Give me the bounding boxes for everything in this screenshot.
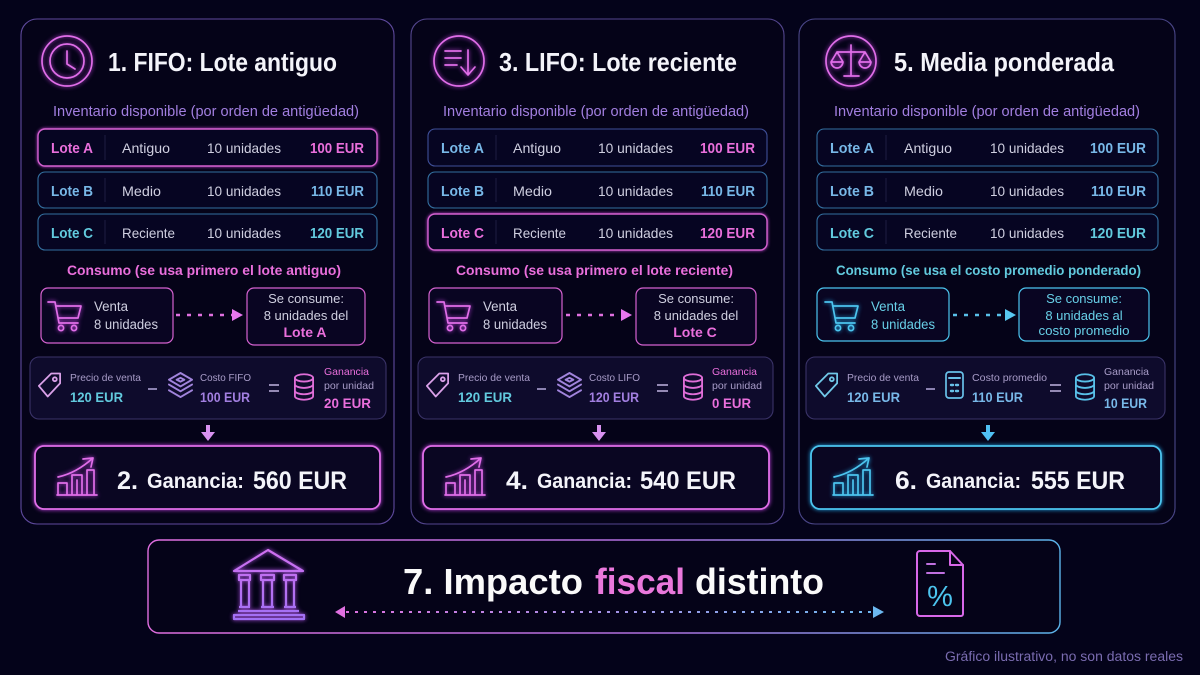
- row: Lote C: 120 EUR: [310, 226, 364, 242]
- row: Lote A: Lote A: [51, 141, 93, 157]
- heading: fiscal impact: [403, 561, 824, 602]
- row: Lote B: 110 EUR: [311, 184, 364, 200]
- consumption box: [636, 288, 756, 345]
- consumption box: 8 unidades del: [264, 308, 348, 323]
- sale box: Venta: [483, 299, 517, 314]
- arrow: down: [201, 425, 215, 441]
- consumption box: [1019, 288, 1149, 341]
- row: Lote A: Antiguo: [122, 140, 170, 156]
- result: 2.: [117, 467, 138, 495]
- row: Lote C: 10 unidades: [990, 225, 1064, 241]
- consumption box: 8 unidades del: [654, 308, 738, 323]
- row: Lote B: 110 EUR: [701, 184, 755, 200]
- sale box: [817, 288, 949, 341]
- row: Lote B: [428, 172, 767, 208]
- row: Lote A: Lote A: [441, 141, 485, 157]
- row: Lote A: Lote A: [830, 141, 875, 157]
- row: Lote C: Lote C: [441, 226, 485, 242]
- icon: bank: [234, 550, 304, 619]
- row: Lote A: Antiguo: [513, 140, 561, 156]
- row: Lote C: [38, 214, 377, 250]
- row: Lote C: [817, 214, 1158, 250]
- formula: Precio de venta: [847, 372, 919, 384]
- row: Lote A: 100 EUR: [700, 141, 755, 157]
- sale box: 8 unidades: [94, 317, 158, 332]
- sale box: Venta: [871, 299, 905, 314]
- formula: 120 EUR: [847, 389, 900, 405]
- panel: weighted average: [799, 19, 1175, 524]
- formula: Ganancia: [324, 366, 369, 378]
- icon: tax document: %: [927, 581, 953, 613]
- heading: fiscal impact: fiscal: [595, 561, 685, 602]
- formula: por unidad: [324, 380, 374, 392]
- subheading: consumption: Consumo (se usa primero el lote antiguo): [67, 262, 341, 278]
- icon: tax document: [917, 551, 963, 616]
- result: [35, 446, 380, 509]
- result: Ganancia:: [147, 470, 244, 493]
- row: Lote C: Lote C: [51, 226, 93, 242]
- row: Lote A: [38, 129, 377, 166]
- formula: [418, 357, 773, 419]
- subheading: consumption: Consumo (se usa primero el lote reciente): [456, 262, 733, 278]
- sale box: [41, 288, 173, 343]
- formula: Precio de venta: [458, 372, 530, 384]
- panel: FIFO: [21, 19, 394, 524]
- row: Lote A: [428, 129, 767, 166]
- row: Lote B: Medio: [904, 183, 943, 199]
- consumption box: 8 unidades al: [1045, 308, 1123, 323]
- row: Lote B: Lote B: [830, 184, 874, 200]
- formula: 20 EUR: [324, 395, 371, 411]
- row: Lote A: 10 unidades: [207, 140, 281, 156]
- formula: 120 EUR: [70, 389, 123, 405]
- row: Lote B: [38, 172, 377, 208]
- result: [811, 446, 1161, 509]
- consumption box: Se consume:: [268, 291, 344, 306]
- formula: 120 EUR: [589, 389, 639, 405]
- subheading: inventory: Inventario disponible (por orden de antigüedad): [834, 104, 1140, 120]
- formula: por unidad: [1104, 380, 1154, 392]
- row: Lote B: 10 unidades: [598, 183, 673, 199]
- formula: Precio de venta: [70, 372, 141, 384]
- sale box: 8 unidades: [871, 317, 935, 332]
- subheading: inventory: Inventario disponible (por orden de antigüedad): [53, 104, 359, 120]
- formula: Ganancia: [1104, 366, 1149, 378]
- result: 4.: [506, 467, 528, 495]
- consumption box: costo promedio: [1038, 323, 1130, 338]
- formula: Costo promedio: [972, 372, 1047, 384]
- formula: [806, 357, 1165, 419]
- formula: por unidad: [712, 380, 762, 392]
- arrow: down: [981, 425, 995, 441]
- row: Lote C: Lote C: [830, 226, 875, 242]
- row: Lote B: 110 EUR: [1091, 184, 1146, 200]
- icon: clock: [42, 36, 92, 86]
- result: [423, 446, 769, 509]
- arrow: dotted: [176, 309, 243, 321]
- row: Lote C: Reciente: [904, 225, 957, 241]
- subheading: inventory: Inventario disponible (por orden de antigüedad): [443, 104, 749, 120]
- arrow: double-headed: [335, 606, 884, 618]
- consumption box: Lote A: [283, 324, 327, 340]
- icon: sort descending: [434, 36, 484, 86]
- formula: 0 EUR: [712, 395, 751, 411]
- row: Lote B: Medio: [122, 183, 161, 199]
- subheading: consumption: Consumo (se usa el costo promedio ponderado): [836, 262, 1141, 278]
- formula: 100 EUR: [200, 389, 250, 405]
- row: Lote B: 10 unidades: [990, 183, 1064, 199]
- icon: scales: [826, 36, 876, 86]
- row: Lote C: 120 EUR: [700, 226, 755, 242]
- formula: Ganancia: [712, 366, 757, 378]
- row: Lote C: [428, 214, 767, 250]
- footnote: Gráfico ilustrativo, no son datos reales: [945, 649, 1183, 664]
- row: Lote C: 120 EUR: [1090, 226, 1146, 242]
- formula: Costo LIFO: [589, 372, 640, 384]
- row: Lote C: Reciente: [122, 225, 175, 241]
- formula: [30, 357, 386, 419]
- heading: weighted average: 5. Media ponderada: [894, 47, 1114, 77]
- row: Lote B: Lote B: [51, 184, 93, 200]
- row: Lote C: 10 unidades: [207, 225, 281, 241]
- row: Lote A: 10 unidades: [990, 140, 1064, 156]
- row: Lote B: [817, 172, 1158, 208]
- consumption box: Se consume:: [1046, 291, 1122, 306]
- row: Lote A: 100 EUR: [310, 141, 364, 157]
- row: Lote A: 10 unidades: [598, 140, 673, 156]
- icon: calculator: [946, 372, 963, 398]
- formula: 10 EUR: [1104, 395, 1147, 411]
- panel: LIFO: [411, 19, 784, 524]
- result: Ganancia:: [537, 470, 632, 493]
- row: Lote B: 10 unidades: [207, 183, 281, 199]
- consumption box: [247, 288, 365, 345]
- heading: fiscal impact: 7. Impacto: [403, 561, 583, 602]
- row: Lote B: Lote B: [441, 184, 484, 200]
- sale box: Venta: [94, 299, 128, 314]
- consumption box: Lote C: [673, 324, 717, 340]
- banner: fiscal impact: [148, 540, 1060, 633]
- heading: LIFO: 3. LIFO: Lote reciente: [499, 47, 737, 77]
- heading: fiscal impact: distinto: [695, 561, 824, 602]
- row: Lote A: 100 EUR: [1090, 141, 1146, 157]
- formula: 110 EUR: [972, 389, 1023, 405]
- sale box: [429, 288, 562, 343]
- result: 6.: [895, 467, 917, 495]
- result: 555 EUR: [1031, 467, 1125, 495]
- row: Lote C: Reciente: [513, 225, 566, 241]
- row: Lote A: Antiguo: [904, 140, 952, 156]
- result: 560 EUR: [253, 467, 347, 495]
- consumption box: Se consume:: [658, 291, 734, 306]
- result: 540 EUR: [640, 467, 736, 495]
- heading: FIFO: 1. FIFO: Lote antiguo: [108, 47, 337, 77]
- formula: 120 EUR: [458, 389, 512, 405]
- sale box: 8 unidades: [483, 317, 547, 332]
- row: Lote B: Medio: [513, 183, 552, 199]
- arrow: down: [592, 425, 606, 441]
- arrow: dotted: [953, 309, 1016, 321]
- arrow: dotted: [566, 309, 632, 321]
- result: Ganancia:: [926, 470, 1021, 493]
- row: Lote C: 10 unidades: [598, 225, 673, 241]
- row: Lote A: [817, 129, 1158, 166]
- formula: Costo FIFO: [200, 372, 251, 384]
